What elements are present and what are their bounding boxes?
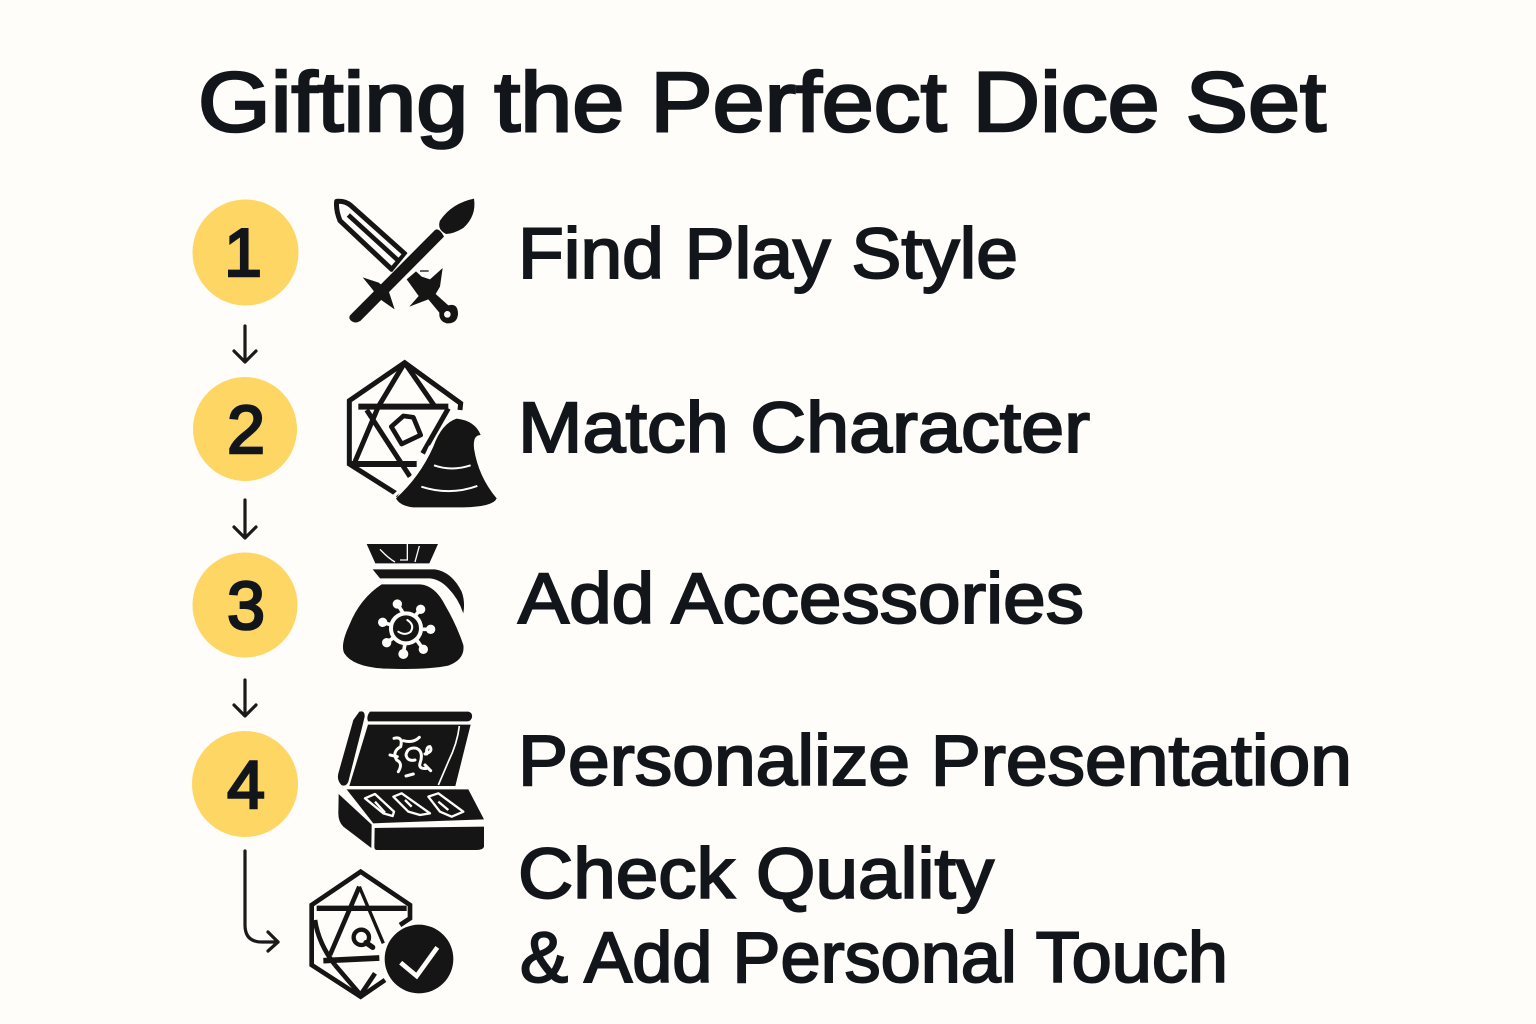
- step 2 number badge: 2: [227, 392, 265, 468]
- step 1 number badge: [192, 200, 298, 306]
- label: step 4: Personalize Presentation: [518, 722, 1352, 801]
- icon: crossed sword and brush: [336, 199, 474, 323]
- label: final step: & Add Personal Touch: [520, 919, 1228, 998]
- icon: d20 die with check badge: [312, 872, 453, 997]
- step 2 number badge: [193, 377, 297, 481]
- arrow 4 to final step: [245, 851, 278, 951]
- step 4 number badge: [192, 731, 298, 837]
- arrow 1 to 2: [234, 326, 256, 362]
- arrow 2 to 3: [234, 500, 256, 538]
- label: final step: [518, 835, 1228, 998]
- arrow 3 to 4: [234, 680, 256, 716]
- icon: dice bag: [343, 544, 464, 669]
- label: final step: Check Quality: [518, 835, 995, 914]
- label: step 2: Match Character: [518, 389, 1090, 468]
- step 1 number badge: 1: [224, 215, 262, 291]
- step 3 number badge: [192, 552, 298, 658]
- title: Gifting the Perfect Dice Set: [198, 55, 1326, 149]
- icon: presentation box: [338, 711, 484, 850]
- step 4 number badge: 4: [227, 747, 265, 823]
- step 3 number badge: 3: [227, 568, 265, 644]
- label: step 3: Add Accessories: [518, 560, 1084, 639]
- label: step 1: Find Play Style: [518, 215, 1018, 294]
- icon: d20 die with wizard hat: [349, 363, 497, 507]
